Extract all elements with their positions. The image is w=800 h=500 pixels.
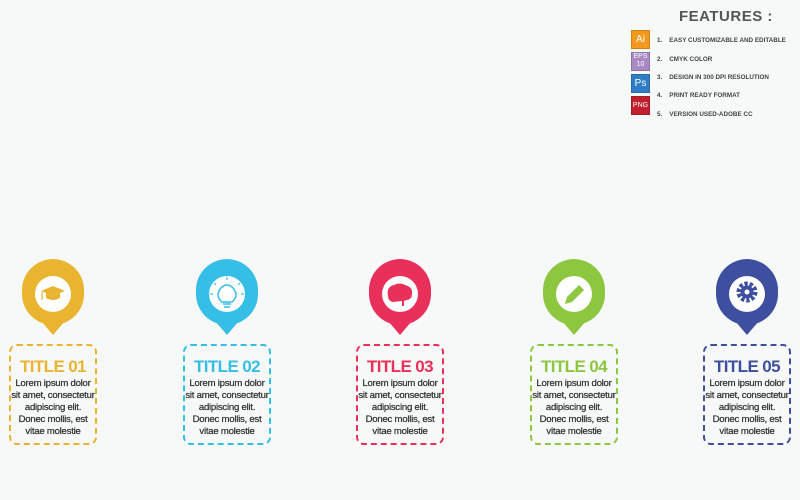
feature 4: 4. PRINT READY FORMAT: [657, 92, 740, 99]
card 4: Donec mollis, est: [540, 414, 608, 425]
pin 2: light bulb: [196, 259, 258, 335]
feature 1: 1. EASY CUSTOMIZABLE AND EDITABLE: [657, 37, 786, 44]
card 5: Lorem ipsum dolor: [709, 378, 785, 389]
card 4: adipiscing elit.: [546, 402, 602, 413]
card 2: Donec mollis, est: [193, 414, 261, 425]
card 2: TITLE 02: [194, 357, 260, 376]
card 3: Lorem ipsum dolor: [362, 378, 438, 389]
pin 1: graduation cap: [22, 259, 84, 335]
card 1: TITLE 01: [20, 357, 86, 376]
card 2: sit amet, consectetur: [185, 390, 269, 401]
feature 2: 2. CMYK COLOR: [657, 56, 712, 63]
card 5: Donec mollis, est: [713, 414, 781, 425]
icon: PNG: [631, 96, 650, 115]
card 4: Lorem ipsum dolor: [536, 378, 612, 389]
icon: EPS: EPS: [633, 53, 648, 60]
pin 5: gear: [716, 259, 778, 335]
card 3: Donec mollis, est: [366, 414, 434, 425]
icon: Ps: [631, 74, 650, 93]
pin 4: pencil: [543, 259, 605, 335]
card 1: Lorem ipsum dolor: [15, 378, 91, 389]
icon: Ai: Ai: [636, 34, 645, 45]
feature 5: 5. VERSION USED-ADOBE CC: [657, 111, 753, 118]
card 2: [183, 344, 271, 445]
card 3: TITLE 03: [367, 357, 433, 376]
card 1: Donec mollis, est: [19, 414, 87, 425]
card 3: sit amet, consectetur: [358, 390, 442, 401]
card 3: [356, 344, 444, 445]
icon: Ai: [631, 30, 650, 49]
pin 3: brain: [369, 259, 431, 335]
card 2: Lorem ipsum dolor: [189, 378, 265, 389]
card 5: adipiscing elit.: [719, 402, 775, 413]
card 4: TITLE 04: [541, 357, 607, 376]
card 5: sit amet, consectetur: [705, 390, 789, 401]
card 2: adipiscing elit.: [199, 402, 255, 413]
icon: EPS: [631, 52, 650, 71]
icon: EPS: 10: [637, 61, 644, 68]
features list: [631, 30, 786, 118]
card 1: vitae molestie: [25, 426, 81, 437]
card 4: sit amet, consectetur: [532, 390, 616, 401]
card 5: vitae molestie: [719, 426, 775, 437]
card 3: vitae molestie: [372, 426, 428, 437]
feature 3: 3. DESIGN IN 300 DPI RESOLUTION: [657, 74, 769, 81]
features title: FEATURES :: [679, 8, 773, 25]
card 2: vitae molestie: [199, 426, 255, 437]
icon: Ps: Ps: [635, 78, 646, 89]
card 5: TITLE 05: [714, 357, 780, 376]
card 5: [703, 344, 791, 445]
card 1: adipiscing elit.: [25, 402, 81, 413]
card 4: vitae molestie: [546, 426, 602, 437]
card 4: [530, 344, 618, 445]
card 3: adipiscing elit.: [372, 402, 428, 413]
icon: PNG: PNG: [633, 102, 648, 109]
card 1: sit amet, consectetur: [11, 390, 95, 401]
card 1: [9, 344, 97, 445]
